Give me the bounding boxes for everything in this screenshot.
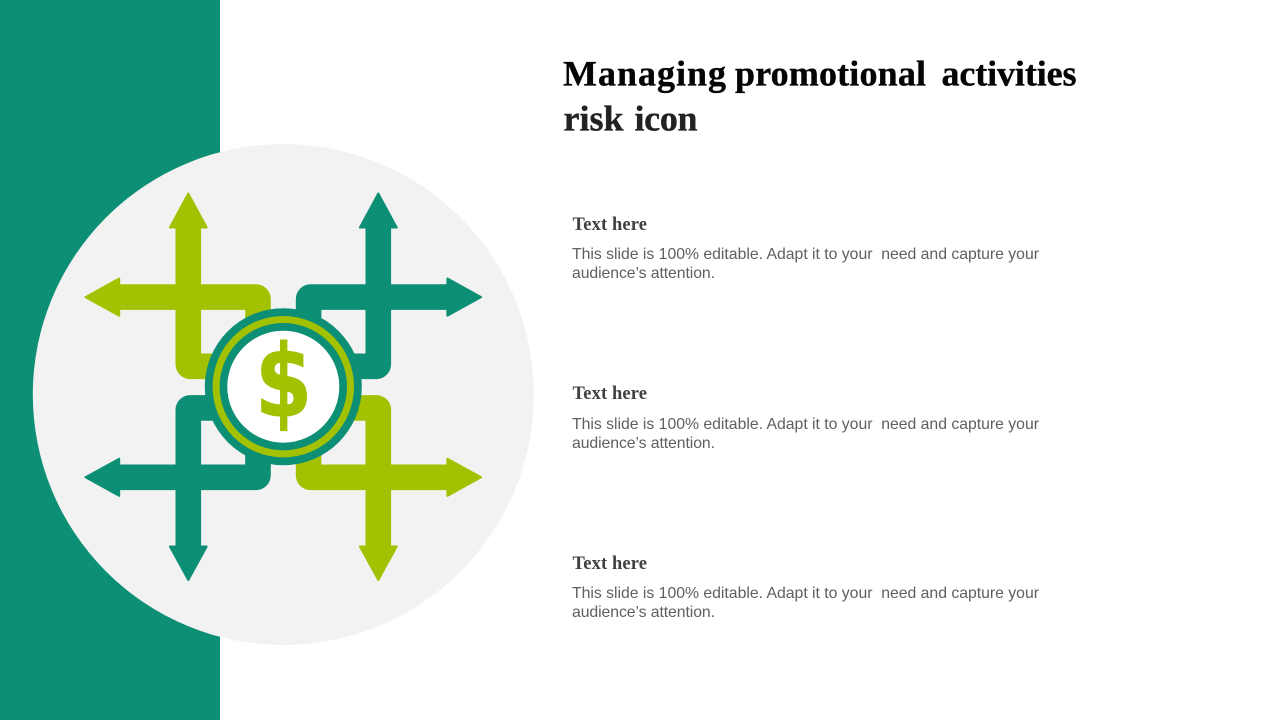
text block 2: audience’s attention.: [572, 435, 715, 452]
text block 1: audience’s attention.: [572, 265, 715, 282]
icon: promotional risk arrows with dollar coin: [86, 194, 481, 580]
arrow: top-right teal: [309, 194, 481, 366]
text block 3: audience’s attention.: [572, 604, 715, 621]
grey background circle: [33, 144, 534, 645]
title: icon: [634, 98, 698, 138]
title: [563, 54, 1076, 138]
title: risk: [564, 98, 624, 138]
arrow: top-left lime: [86, 194, 258, 366]
left green band: [0, 0, 220, 720]
title: promotional: [735, 54, 926, 94]
text block 2: Text here: [572, 384, 647, 404]
icon: dollar coin: $: [255, 323, 312, 440]
text block 1: Text here: [572, 215, 647, 235]
text block 3: [572, 554, 1039, 621]
arrow: bottom-left teal: [86, 408, 258, 580]
arrow: bottom-right lime: [309, 408, 481, 580]
text block 1: This slide is 100% editable. Adapt it to your need and capture your: [572, 246, 1039, 263]
title: Managing: [563, 54, 726, 94]
text block 2: [572, 384, 1039, 452]
text block 1: [572, 215, 1039, 282]
icon: dollar coin: [205, 308, 362, 465]
text block 3: This slide is 100% editable. Adapt it to your need and capture your: [572, 585, 1039, 602]
title: activities: [942, 54, 1076, 94]
text block 2: This slide is 100% editable. Adapt it to your need and capture your: [572, 416, 1039, 433]
text block 3: Text here: [572, 554, 647, 574]
